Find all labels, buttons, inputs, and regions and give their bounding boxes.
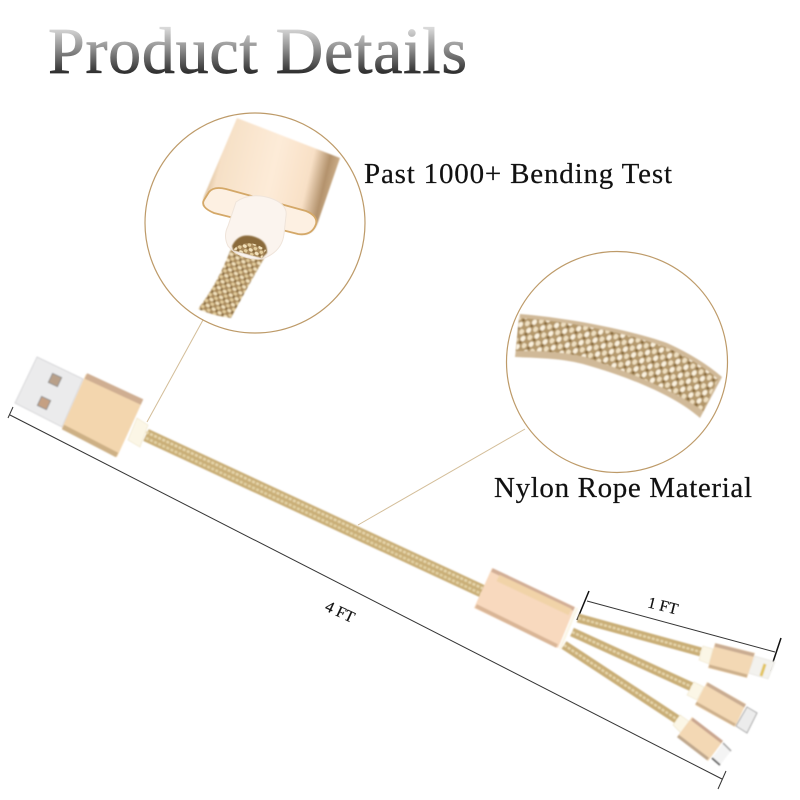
USB silver plug xyxy=(15,357,83,427)
micro usb metal body xyxy=(677,717,723,761)
USB white collar xyxy=(128,418,148,447)
braided cable close-up xyxy=(198,243,268,318)
USB connector xyxy=(15,357,148,457)
white strain relief collar xyxy=(226,196,286,259)
main braided cable xyxy=(146,432,484,595)
lightning gold contacts xyxy=(761,664,765,676)
branch cables xyxy=(564,618,701,720)
magnifier circle xyxy=(145,113,365,333)
splitter white edge xyxy=(560,608,577,649)
leader line: bending test callout xyxy=(147,320,203,422)
panel: bending test magnifier xyxy=(145,113,365,333)
shell opening xyxy=(203,188,316,234)
micro usb tip xyxy=(712,743,731,765)
branch cable: lightning xyxy=(578,618,701,652)
dimension: 1 FT xyxy=(577,591,781,671)
title: Product Details xyxy=(48,15,467,88)
braid outer shape xyxy=(515,314,722,418)
lightning tip xyxy=(748,656,775,679)
type-c tip xyxy=(736,707,757,733)
metal connector shell xyxy=(203,118,340,235)
panel: nylon material magnifier xyxy=(506,252,728,472)
leader line: nylon callout xyxy=(358,429,525,525)
collar mouth xyxy=(232,235,267,258)
magnifier circle xyxy=(506,252,728,472)
dimension line xyxy=(8,407,726,789)
dimension line xyxy=(587,601,775,652)
dimension text: 4 FT xyxy=(322,598,357,627)
type-c collar xyxy=(687,682,704,700)
USB metal body xyxy=(62,374,143,457)
micro usb collar xyxy=(673,715,690,733)
micro usb connector xyxy=(673,715,731,765)
braided nylon close-up xyxy=(516,318,718,411)
label: nylon rope: Nylon Rope Material xyxy=(494,472,752,504)
USB contact holes xyxy=(37,373,62,410)
type-c connector xyxy=(687,682,757,733)
branch cable: micro usb xyxy=(564,645,678,720)
three-way splitter xyxy=(474,568,577,649)
splitter body xyxy=(474,568,575,648)
branch cable: type-c xyxy=(572,632,692,687)
lightning collar xyxy=(699,646,713,664)
lightning connector xyxy=(699,643,775,679)
dimension text: 1 FT xyxy=(646,595,680,618)
type-c metal body xyxy=(695,682,746,727)
label: bending test: Past 1000+ Bending Test xyxy=(364,158,672,190)
lightning metal body xyxy=(708,643,755,678)
